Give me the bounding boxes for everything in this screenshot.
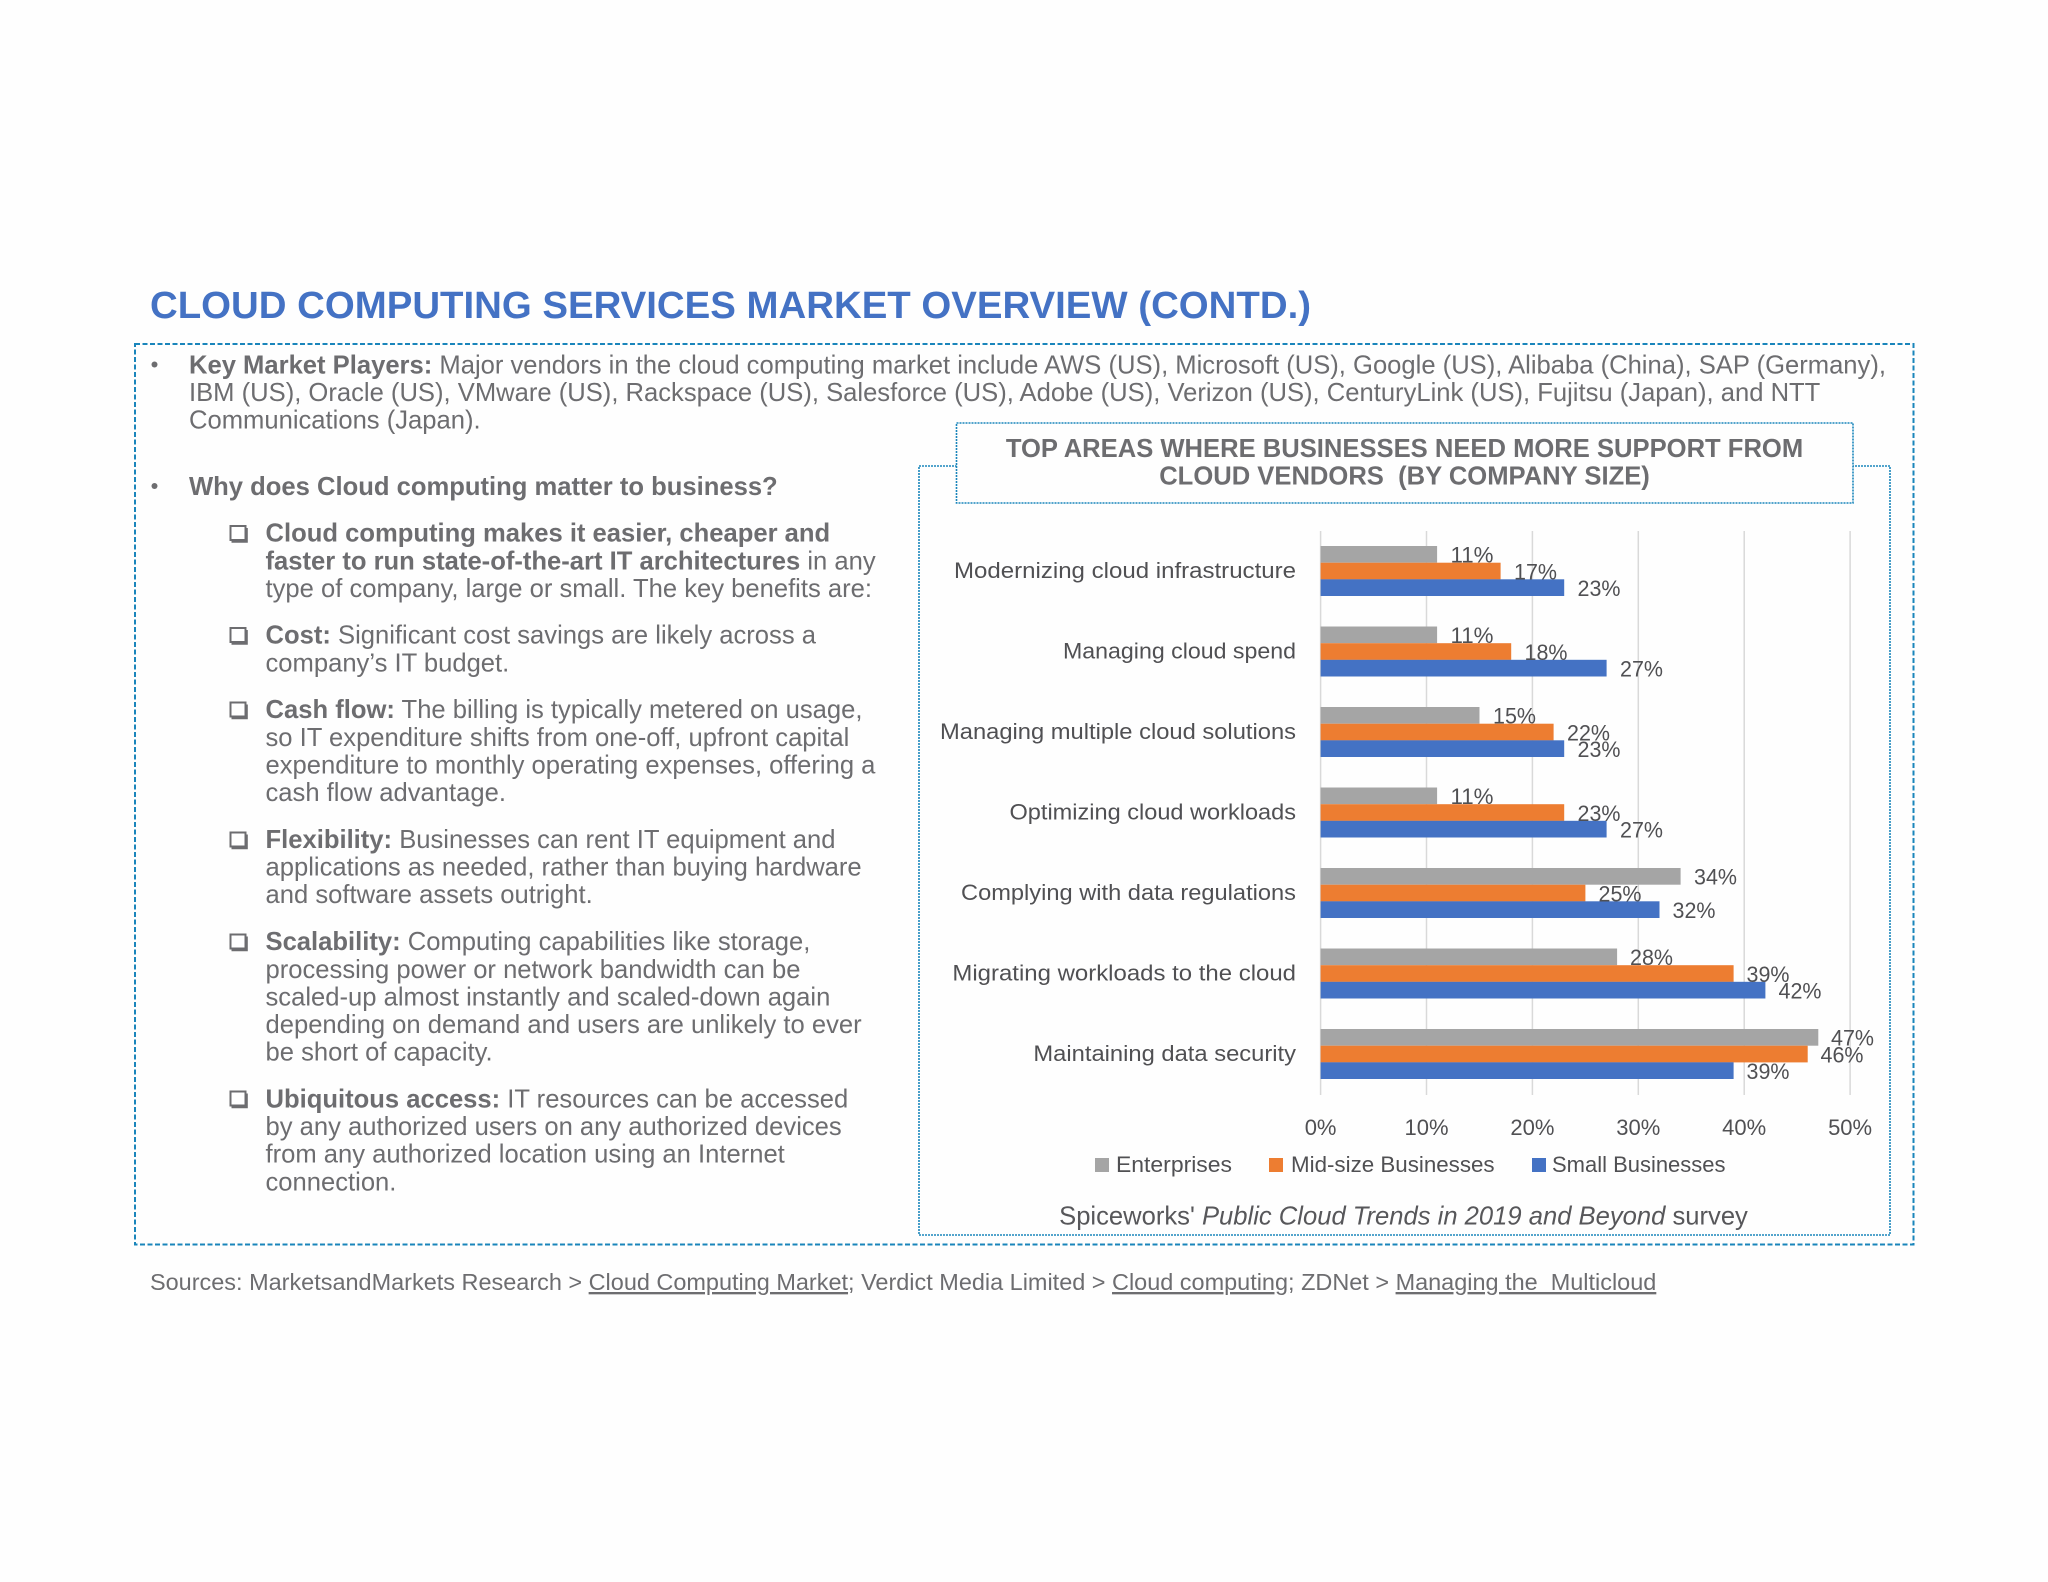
x axis labels: 10% (1404, 1115, 1449, 1140)
category: maintaining data security: 39% (1746, 1059, 1790, 1084)
chart heading box: CLOUD VENDORS (BY COMPANY SIZE) (1159, 462, 1650, 490)
category: migrating workloads to the cloud (952, 945, 1822, 1004)
category: migrating workloads to the cloud: 42% (1778, 978, 1822, 1004)
list item: cash flow: expenditure to monthly operating expenses, offering a (266, 751, 876, 779)
legend (1095, 1152, 1726, 1177)
category: modernizing cloud infrastructure: 11% (1450, 542, 1494, 568)
list item: cash flow: so IT expenditure shifts from one-off, upfront capital (266, 724, 849, 752)
legend: Mid-size Businesses (1291, 1152, 1495, 1177)
category: modernizing cloud infrastructure (954, 542, 1620, 601)
list item: flexibility (230, 826, 862, 909)
list item: cash flow: Cash flow: The billing is typically metered on usage, (266, 696, 862, 724)
x axis labels (1305, 1115, 1872, 1140)
list item: cash flow (230, 696, 876, 807)
x axis labels: 20% (1510, 1115, 1554, 1140)
category: managing multiple cloud solutions: 15% (1493, 704, 1536, 728)
category: modernizing cloud infrastructure: 17% (1514, 560, 1557, 584)
category: managing cloud spend: 11% (1450, 623, 1494, 648)
category: maintaining data security (1033, 1026, 1874, 1084)
panel: chart frame (919, 466, 1890, 1235)
category: optimizing cloud workloads (1010, 784, 1663, 842)
category: optimizing cloud workloads: Optimizing cloud workloads (1010, 800, 1296, 824)
legend: Enterprises (1116, 1152, 1232, 1177)
category: complying with data regulations: 25% (1598, 882, 1642, 906)
list item: scalability: Scalability: Computing capabilities like storage, (266, 928, 810, 956)
category: managing multiple cloud solutions: Managing multiple cloud solutions (940, 719, 1296, 744)
list item: cost: Cost: Significant cost savings are likely across a (266, 622, 817, 650)
list item: ubiquitous access: by any authorized users on any authorized devices (266, 1113, 842, 1141)
text block: key market players (152, 352, 1886, 434)
category: managing multiple cloud solutions (940, 704, 1620, 762)
bar chart: support areas by company size (940, 531, 1874, 1177)
x axis labels: 40% (1722, 1115, 1766, 1140)
category: managing cloud spend (1063, 623, 1663, 682)
category: migrating workloads to the cloud: Migrating workloads to the cloud (952, 960, 1296, 986)
sources footnote: Sources: MarketsandMarkets Research > Cloud Computing Market; Verdict Media Limited > Cloud computing; ZDNet > Managing the Multicloud (150, 1269, 1656, 1295)
list item: ubiquitous access: Ubiquitous access: IT resources can be accessed (266, 1086, 848, 1114)
x axis labels: 0% (1305, 1115, 1336, 1140)
category: migrating workloads to the cloud: 39% (1746, 962, 1790, 987)
legend: Small Businesses (1552, 1152, 1726, 1177)
category: optimizing cloud workloads: 11% (1450, 784, 1494, 809)
list item: ubiquitous access (230, 1086, 848, 1196)
list item: ubiquitous access: connection. (266, 1168, 396, 1196)
text block: key market players: Key Market Players: Major vendors in the cloud computing market include AWS (US), Microsoft (US), Google (US), Alibaba (China), SAP (Germany), (189, 352, 1886, 380)
category: complying with data regulations (961, 864, 1737, 923)
category: complying with data regulations: Complying with data regulations (961, 880, 1296, 905)
list item: scalability: depending on demand and users are unlikely to ever (266, 1011, 862, 1039)
list item: cost (230, 622, 817, 677)
list item: overview: type of company, large or small. The key benefits are: (266, 575, 872, 603)
list item: scalability (230, 928, 862, 1067)
category: managing multiple cloud solutions: 22% (1567, 720, 1610, 746)
category: migrating workloads to the cloud: 28% (1630, 945, 1673, 970)
category: maintaining data security: Maintaining data security (1033, 1041, 1296, 1066)
panel: main content frame (135, 344, 1914, 1244)
category: managing cloud spend: 18% (1524, 640, 1568, 665)
category: maintaining data security: 46% (1820, 1042, 1864, 1068)
list item: flexibility: applications as needed, rather than buying hardware (266, 854, 862, 882)
category: managing cloud spend: Managing cloud spend (1063, 638, 1296, 664)
list item: ubiquitous access: from any authorized location using an Internet (266, 1141, 785, 1169)
category: optimizing cloud workloads: 23% (1578, 801, 1620, 826)
chart heading box: TOP AREAS WHERE BUSINESSES NEED MORE SUPPORT FROM (1006, 435, 1803, 463)
chart source caption: Spiceworks' Public Cloud Trends in 2019 and Beyond survey (1059, 1202, 1748, 1230)
list item: overview: faster to run state-of-the-art IT architectures in any (266, 547, 876, 575)
category: optimizing cloud workloads: 27% (1620, 818, 1663, 842)
list item: scalability: processing power or network bandwidth can be (266, 956, 800, 984)
category: maintaining data security: 47% (1831, 1026, 1874, 1050)
text block: key market players: Communications (Japan). (189, 406, 481, 434)
chart heading box (956, 423, 1853, 503)
text block: why cloud matters heading: Why does Cloud computing matter to business? (189, 473, 778, 501)
list item: cost: company’s IT budget. (266, 649, 509, 677)
category: complying with data regulations: 32% (1672, 898, 1716, 923)
text block: key market players: IBM (US), Oracle (US), VMware (US), Rackspace (US), Salesforce (US), Adobe (US), Verizon (US), CenturyLink (US), Fujitsu (Japan), and NTT (189, 379, 1821, 407)
category: managing cloud spend: 27% (1620, 656, 1663, 682)
category: modernizing cloud infrastructure: 23% (1578, 576, 1620, 601)
list item: flexibility: and software assets outright. (266, 881, 593, 909)
x axis labels: 30% (1616, 1115, 1660, 1140)
category: modernizing cloud infrastructure: Modernizing cloud infrastructure (954, 558, 1296, 583)
title: CLOUD COMPUTING SERVICES MARKET OVERVIEW (CONTD.) (150, 284, 1311, 327)
list item: overview (230, 520, 876, 603)
list item: cash flow: cash flow advantage. (266, 779, 506, 807)
list item: scalability: be short of capacity. (266, 1039, 493, 1067)
x axis labels: 50% (1828, 1115, 1872, 1140)
list item: scalability: scaled-up almost instantly and scaled-down again (266, 983, 830, 1011)
list item: flexibility: Flexibility: Businesses can rent IT equipment and (266, 826, 836, 854)
category: managing multiple cloud solutions: 23% (1578, 737, 1620, 762)
list item: overview: Cloud computing makes it easier, cheaper and (266, 520, 830, 548)
category: complying with data regulations: 34% (1694, 864, 1737, 890)
